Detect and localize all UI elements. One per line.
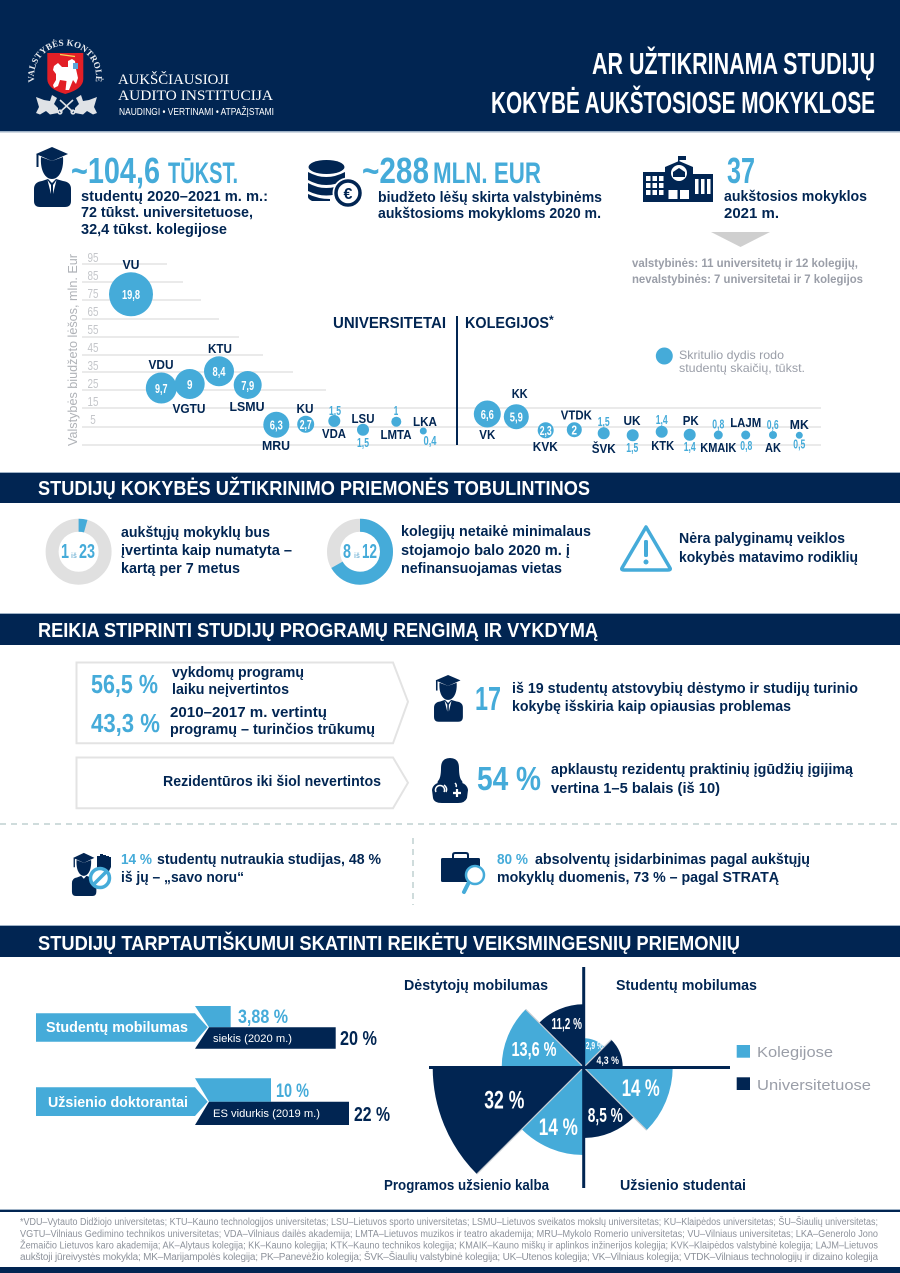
college labels: PK [683, 414, 699, 428]
college bubble values: 0,8 [740, 438, 752, 453]
icon: coins with euro [308, 160, 364, 208]
university bubbles [109, 272, 427, 438]
stat: dropouts [121, 852, 381, 886]
panel: programme evaluation arrow box: 43,3 % [91, 708, 160, 738]
college bubble values: 1,4 [656, 412, 668, 427]
university labels [122, 258, 437, 453]
donut: 8 of 12: 12 [362, 541, 377, 563]
stat: 54 percent [477, 760, 854, 797]
quadrant headings [384, 978, 757, 1194]
stat: higher education institutions: aukštosios mokyklos [724, 189, 867, 205]
panel: residencies arrow box [76, 758, 408, 808]
note: institution breakdown: valstybinės: 11 universitetų ir 12 kolegijų, [632, 256, 858, 270]
college bubble values: 2 [572, 422, 577, 438]
university bubble values [122, 287, 437, 450]
text: minimum admission score: stojamojo balo 2020 m. į [401, 543, 570, 559]
university labels: LSU [352, 412, 374, 426]
icon: warning triangle [622, 527, 670, 570]
university labels: MRU [262, 439, 290, 453]
y axis labels: 45 [88, 340, 98, 355]
bubble size legend: Skritulio dydis rodo [679, 348, 784, 362]
polar chart: internationalisation [384, 967, 757, 1194]
wedge values: 11,2 % [551, 1016, 582, 1033]
college labels [479, 387, 809, 456]
college bubble values: 6,6 [481, 407, 494, 422]
y axis labels: 35 [88, 358, 98, 373]
donut: 8 of 12: iš [354, 553, 360, 560]
panel: programme evaluation arrow box [76, 662, 408, 743]
wedge values [484, 1016, 660, 1141]
group headings: UNIVERSITETAI [333, 315, 446, 332]
college labels: LAJM [730, 416, 761, 430]
college bubble values: 0,5 [793, 436, 805, 452]
logo: state audit office emblem: VALSTYBĖS KONTROLĖ [28, 39, 104, 83]
university labels: KTU [208, 342, 232, 356]
quadrant headings: Programos užsienio kalba [384, 1178, 550, 1194]
legend: colleges and universities [737, 1044, 871, 1094]
stat: 17 of 19 [475, 680, 858, 717]
panel: programme evaluation arrow box: 2010–2017 m. vertintų [170, 705, 327, 721]
university labels: VDU [148, 358, 174, 372]
wedge values: 8,5 % [588, 1105, 623, 1127]
text: minimum admission score [401, 524, 591, 577]
group headings: * [549, 313, 554, 327]
bar comparison: foreign doctoral students [36, 1078, 390, 1126]
icon: coins with euro: € [344, 186, 353, 203]
bar comparison: student mobility [36, 1006, 377, 1050]
wedge values: 13,6 % [512, 1039, 557, 1061]
section heading: quality assurance [0, 472, 900, 503]
stat: 17 of 19: 17 [475, 680, 501, 717]
note: institution breakdown: nevalstybinės: 7 universitetai ir 7 kolegijos [632, 272, 863, 286]
y axis labels: 85 [88, 268, 98, 283]
quadrant headings: Studentų mobilumas [616, 978, 757, 994]
college labels: KMAIK [700, 441, 736, 455]
college bubble values: 1,4 [684, 439, 696, 454]
stat: budget [362, 150, 602, 222]
university labels: VDA [322, 427, 346, 441]
donut: 1 of 23: 23 [79, 541, 95, 563]
section heading: internationalisation [0, 925, 900, 957]
college bubble values [481, 407, 805, 455]
text: minimum admission score: kolegijų netaikė minimalaus [401, 524, 591, 540]
university bubble values: 9,7 [155, 381, 168, 396]
stat: graduate employment: absolventų įsidarbinimas pagal aukštųjų [535, 852, 810, 868]
university labels: LSMU [230, 400, 264, 414]
college bubble values: 5,9 [510, 410, 523, 424]
wedge values: 14 % [539, 1114, 578, 1141]
bubble size legend: studentų skaičių, tūkst. [679, 361, 805, 375]
bar comparison: foreign doctoral students: 10 % [276, 1081, 309, 1102]
university bubble values: 1,5 [329, 403, 341, 418]
bubble chart: universities and colleges [65, 250, 821, 456]
university labels: VGTU [172, 402, 206, 416]
note: institution breakdown [632, 256, 863, 286]
university bubble values: 6,3 [270, 418, 283, 432]
bar comparison: student mobility: 20 % [340, 1028, 377, 1050]
y axis labels: 15 [88, 394, 98, 409]
section heading: quality assurance: STUDIJŲ KOKYBĖS UŽTIKRINIMO PRIEMONĖS TOBULINTINOS [38, 476, 590, 500]
college labels: VTDK [561, 408, 592, 422]
stat: 54 percent: apklaustų rezidentų praktinių įgūdžių įgijimą [551, 762, 854, 778]
stat: budget: MLN. EUR [433, 157, 541, 190]
university bubble values: 1 [394, 403, 398, 418]
y axis labels: 75 [88, 286, 98, 301]
college labels: KK [512, 387, 528, 401]
wedge values: 2,9 % [586, 1041, 603, 1052]
group headings [333, 313, 554, 445]
institution name: NAUDINGI • VERTINAMI • ATPAŽĮSTAMI [119, 105, 274, 118]
panel: programme evaluation arrow box: laiku neįvertintos [172, 682, 289, 698]
university labels: LKA [413, 415, 437, 429]
y axis title: Valstybės biudžeto lėšos, mln. Eur [65, 253, 80, 446]
university bubble values: 2,7 [300, 417, 312, 432]
university bubble values: 9 [187, 377, 192, 392]
icon: student with stop sign [72, 853, 111, 896]
donut: 1 of 23 [52, 525, 105, 578]
text: no comparable indicators: Nėra palyginamų veiklos [679, 531, 845, 547]
university bubble values: 8,4 [212, 364, 226, 379]
legend: colleges and universities: Kolegijose [757, 1044, 833, 1061]
stat: students [71, 150, 268, 238]
panel: programme evaluation arrow box: vykdomų programų [172, 665, 304, 681]
college labels: ŠVK [592, 441, 616, 456]
title [491, 45, 875, 120]
icon: doctor [432, 758, 468, 803]
bar comparison: student mobility: siekis (2020 m.) [213, 1033, 292, 1045]
icon: student representative [434, 675, 463, 722]
college labels: KVK [533, 440, 558, 454]
section heading: study programmes [0, 613, 900, 645]
college bubble values: 1,5 [598, 414, 610, 429]
university bubble values: 1,5 [357, 435, 369, 450]
text: no comparable indicators: kokybės matavimo rodiklių [679, 550, 858, 566]
y axis labels: 55 [88, 322, 98, 337]
stat: graduate employment: mokyklų duomenis, 73 % – pagal STRATĄ [497, 870, 780, 886]
college bubble values: 2,3 [540, 423, 552, 438]
stat: 54 percent: vertina 1–5 balais (iš 10) [551, 781, 720, 797]
university labels: LMTA [380, 428, 412, 442]
stat: graduate employment: 80 % [497, 852, 528, 868]
text: evaluation cycle: įvertinta kaip numatyta – [121, 543, 292, 559]
stat: dropouts: iš jų – „savo noru“ [121, 870, 244, 886]
icon: student [34, 147, 71, 207]
stat: dropouts: studentų nutraukia studijas, 48 % [157, 852, 381, 868]
wedge values: 14 % [622, 1075, 660, 1102]
stat: students: 72 tūkst. universitetuose, [81, 205, 253, 221]
donut: 1 of 23: 1 [61, 541, 69, 563]
icon: briefcase with magnifier [441, 853, 484, 892]
institution name: AUDITO INSTITUCIJA [118, 88, 273, 104]
stat: budget: ~288 [362, 150, 429, 191]
header band [0, 0, 900, 132]
wedge values: 32 % [484, 1086, 524, 1114]
university bubble values: 19,8 [122, 287, 140, 302]
bar comparison: student mobility: 3,88 % [238, 1007, 288, 1028]
bar comparison: foreign doctoral students: ES vidurkis (2019 m.) [213, 1108, 320, 1120]
logo: state audit office emblem [28, 39, 104, 115]
arrow: breakdown pointer [711, 232, 770, 247]
college labels: AK [765, 441, 781, 455]
stat: 17 of 19: iš 19 studentų atstovybių dėstymo ir studijų turinio [512, 681, 858, 697]
stat: students: TŪKST. [168, 157, 238, 190]
y axis labels: 95 [88, 250, 98, 265]
university bubble values: 0,4 [424, 433, 437, 448]
text: evaluation cycle [121, 525, 292, 577]
text: evaluation cycle: aukštųjų mokyklų bus [121, 525, 270, 541]
stat: dropouts: 14 % [121, 852, 152, 868]
quadrant headings: Dėstytojų mobilumas [404, 978, 548, 994]
footer rule [0, 1209, 900, 1212]
y axis labels: 25 [88, 376, 98, 391]
stat: higher education institutions: 2021 m. [724, 206, 779, 222]
bubble size legend [656, 348, 805, 375]
footnote: abbreviations: aukštoji jūreivystės mokykla; MK–Marijampolės kolegija; PK–Panevėžio kolegija; ŠVK–Šiaulių valstybinė kolegija; UK–Utenos kolegija; VK–Vilniaus kolegija; VTDK–Vilniaus technologijų ir dizaino kolegija [20, 1250, 878, 1263]
section heading: study programmes: REIKIA STIPRINTI STUDIJŲ PROGRAMŲ RENGIMĄ IR VYKDYMĄ [38, 620, 598, 642]
stat: students: studentų 2020–2021 m. m.: [81, 189, 268, 205]
stat: budget: aukštosioms mokykloms 2020 m. [378, 206, 601, 222]
stat: 17 of 19: kokybę išskiria kaip opiausias problemas [512, 699, 791, 715]
donut: 8 of 12 [334, 525, 386, 578]
donut: 8 of 12: 8 [343, 541, 351, 563]
college bubble values: 1,5 [626, 440, 638, 455]
stat: students: 32,4 tūkst. kolegijose [81, 222, 227, 238]
text: no comparable indicators [679, 531, 858, 566]
group headings: KOLEGIJOS [465, 315, 549, 332]
section heading: internationalisation: STUDIJŲ TARPTAUTIŠKUMUI SKATINTI REIKĖTŲ VEIKSMINGESNIŲ PRIEMONIŲ [38, 931, 740, 955]
college labels: VK [479, 428, 495, 442]
stat: students: ~104,6 [71, 150, 160, 191]
college labels: KTK [651, 439, 674, 453]
bar comparison: foreign doctoral students: Užsienio doktorantai [48, 1095, 188, 1111]
university labels: KU [296, 402, 314, 416]
stat: budget: biudžeto lėšų skirta valstybinėms [378, 190, 602, 206]
institution name: AUKŠČIAUSIOJI [118, 71, 229, 88]
college bubble values: 0,8 [712, 416, 724, 432]
bottom band [0, 1267, 900, 1273]
y axis labels: 5 [90, 412, 96, 427]
footnote: abbreviations [20, 1215, 878, 1263]
stat: higher education institutions: 37 [727, 150, 755, 191]
college bubble values: 0,6 [767, 417, 779, 432]
y axis labels [88, 250, 98, 427]
bar comparison: student mobility: Studentų mobilumas [46, 1020, 188, 1036]
bar comparison: foreign doctoral students: 22 % [354, 1104, 390, 1126]
university bubble values: 7,9 [241, 378, 254, 393]
stat: 54 percent: 54 % [477, 760, 541, 797]
wedge values: 4,3 % [596, 1055, 619, 1067]
icon: school building [643, 156, 713, 202]
institution name [118, 71, 274, 118]
stat: higher education institutions [724, 150, 867, 222]
panel: programme evaluation arrow box: programų – turinčios trūkumų [170, 722, 375, 738]
college labels: MK [790, 418, 809, 432]
legend: colleges and universities: Universitetuose [757, 1077, 871, 1094]
college bubbles [474, 400, 803, 441]
donut: 1 of 23: iš [71, 553, 77, 560]
university labels: VU [122, 258, 140, 272]
text: minimum admission score: nefinansuojamas vietas [401, 561, 562, 577]
y axis labels: 65 [88, 304, 98, 319]
stat: graduate employment [497, 852, 810, 886]
panel: programme evaluation arrow box: 56,5 % [91, 669, 158, 699]
panel: residencies arrow box: Rezidentūros iki šiol nevertintos [163, 774, 381, 790]
college labels: UK [624, 414, 640, 428]
quadrant headings: Užsienio studentai [620, 1178, 746, 1194]
text: evaluation cycle: kartą per 7 metus [121, 561, 240, 577]
